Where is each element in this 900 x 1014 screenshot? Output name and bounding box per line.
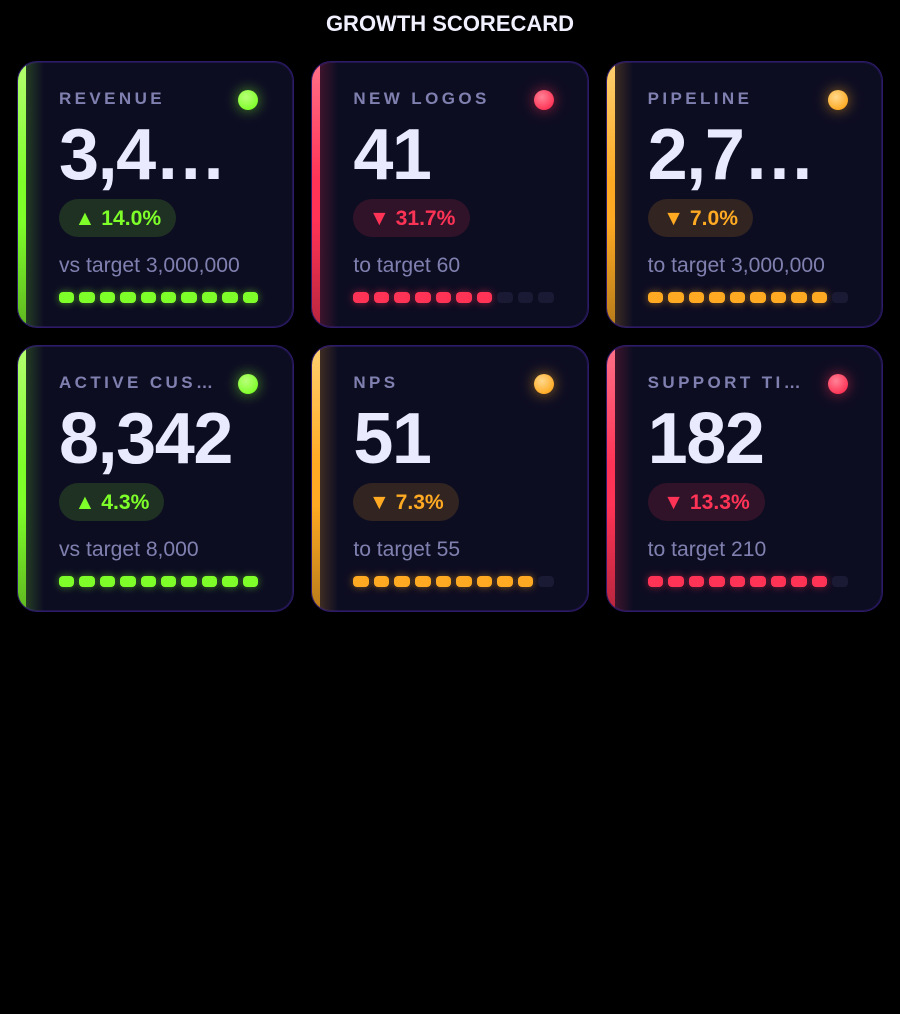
progress segments: nps (348, 570, 554, 592)
target note: new logos: to target 60 (353, 254, 460, 277)
target note: revenue: vs target 3,000,000 (59, 254, 240, 277)
target note: nps: to target 55 (353, 538, 460, 561)
label: nps: NPS (353, 373, 398, 392)
badge: new logos change: ▼ 31.7% (369, 207, 455, 230)
badge: support tickets change: ▼ 13.3% (663, 491, 750, 514)
label: pipeline: PIPELINE (648, 89, 752, 108)
badge: pipeline change (648, 199, 753, 237)
badge: pipeline change: ▼ 7.0% (663, 207, 738, 230)
label: revenue: REVENUE (59, 89, 165, 108)
progress segments: new logos (348, 286, 554, 308)
panel: new logos (311, 61, 589, 328)
panel: revenue (17, 61, 294, 328)
icon: green status dot (238, 374, 258, 394)
panel: active customers (17, 345, 294, 612)
title: GROWTH SCORECARD (326, 11, 574, 36)
progress segments: pipeline (643, 286, 848, 308)
value: active customers: 8,342 (59, 399, 232, 479)
icon: amber status dot (534, 374, 554, 394)
target note: support tickets: to target 210 (648, 538, 766, 561)
progress segments: revenue (54, 286, 263, 308)
icon: red status dot (534, 90, 554, 110)
label: new logos: NEW LOGOS (353, 89, 490, 108)
value: nps: 51 (353, 399, 431, 479)
value: support tickets: 182 (648, 399, 763, 479)
badge: active customers change: ▲ 4.3% (74, 491, 149, 514)
progress segments: support tickets (643, 570, 848, 592)
icon: red status dot (828, 374, 848, 394)
target note: pipeline: to target 3,000,000 (648, 254, 825, 277)
badge: active customers change (59, 483, 164, 521)
icon: green status dot (238, 90, 258, 110)
panel: support tickets (606, 345, 883, 612)
progress segments: active customers (54, 570, 263, 592)
panel: pipeline (606, 61, 883, 328)
badge: nps change: ▼ 7.3% (369, 491, 444, 514)
badge: nps change (353, 483, 459, 521)
panel: nps (311, 345, 589, 612)
badge: new logos change (353, 199, 470, 237)
icon: amber status dot (828, 90, 848, 110)
badge: revenue change (59, 199, 176, 237)
badge: support tickets change (648, 483, 765, 521)
target note: active customers: vs target 8,000 (59, 538, 199, 561)
value: new logos: 41 (353, 115, 431, 195)
badge: revenue change: ▲ 14.0% (74, 207, 161, 230)
